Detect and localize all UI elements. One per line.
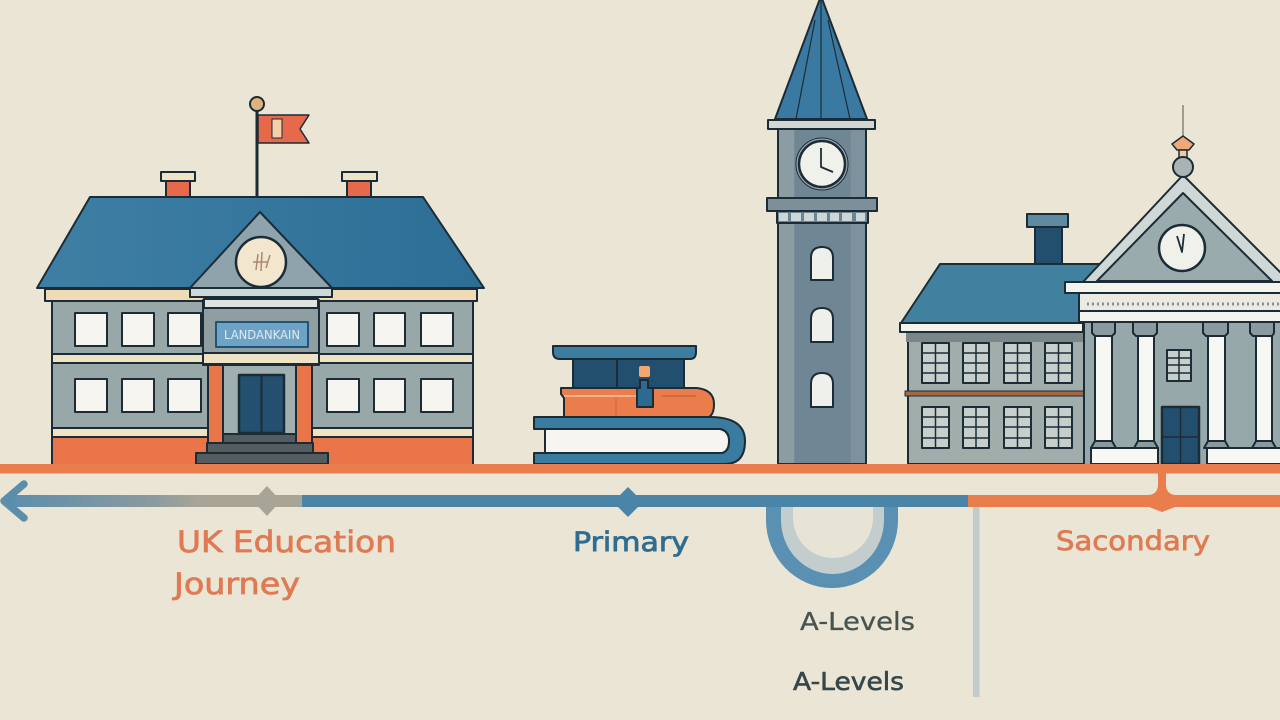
lower wing windows xyxy=(922,407,1072,448)
illustration: secondary school building xyxy=(900,105,1280,465)
label: A-Levels lower: A-Levels xyxy=(793,667,904,696)
gable xyxy=(190,212,332,297)
steps xyxy=(196,434,328,464)
timeline orange segment xyxy=(968,495,1280,507)
label: Secondary: Sacondary xyxy=(1056,526,1210,557)
orange base wall xyxy=(52,437,473,465)
tower clock xyxy=(796,138,848,190)
timeline xyxy=(4,473,1280,697)
secondary connector xyxy=(1149,473,1175,512)
portico wall xyxy=(1084,322,1280,465)
title: UK Education Journey: UK Education xyxy=(177,525,396,559)
pediment clock xyxy=(1159,225,1205,271)
icon: left chimney xyxy=(161,172,195,198)
illustration: clock tower xyxy=(767,0,877,464)
milestone: gray diamond xyxy=(253,486,281,516)
lower windows xyxy=(75,379,453,412)
entrance band xyxy=(203,353,319,364)
vertical divider xyxy=(973,507,980,697)
blue book xyxy=(534,417,745,464)
wing roof xyxy=(901,264,1100,323)
building walls xyxy=(52,300,473,465)
portico window xyxy=(1167,350,1191,381)
orange book xyxy=(561,388,714,417)
entrance recess xyxy=(223,365,296,435)
upper wing windows xyxy=(922,343,1072,383)
upper windows xyxy=(75,313,453,346)
entablature xyxy=(1065,282,1280,293)
spire ledge xyxy=(768,120,875,129)
ground line xyxy=(0,464,1280,474)
clock ledge xyxy=(767,198,877,211)
tower body xyxy=(778,129,866,464)
wing wall xyxy=(908,340,1084,464)
school sign: LANDANKAIN xyxy=(224,328,300,342)
icon: right chimney xyxy=(342,172,377,198)
timeline left segment xyxy=(6,495,302,507)
upper floor band xyxy=(52,354,473,363)
timeline blue segment xyxy=(302,495,969,507)
pediment xyxy=(1083,175,1280,282)
lower floor band xyxy=(52,428,473,437)
illustration: stack of books with graduation cap xyxy=(534,346,745,464)
cap base xyxy=(573,359,684,389)
cornice xyxy=(45,289,477,301)
frieze xyxy=(1079,293,1280,311)
wing cornice xyxy=(900,323,1083,332)
main roof xyxy=(37,197,484,288)
spire xyxy=(775,0,867,119)
dentils xyxy=(777,211,868,223)
arrowhead xyxy=(4,484,24,518)
lower entablature xyxy=(1079,311,1280,322)
wing soffit xyxy=(906,333,1084,342)
title: UK Education Journey xyxy=(172,525,396,601)
milestone: blue diamond xyxy=(613,487,643,517)
icon: flag and pole xyxy=(250,97,309,198)
cap board xyxy=(553,346,696,359)
columns xyxy=(208,365,312,443)
tower windows xyxy=(811,247,833,407)
entrance lintel xyxy=(204,299,318,308)
portico columns xyxy=(1091,322,1276,448)
wing belt course xyxy=(905,391,1089,396)
gable trim xyxy=(190,288,332,297)
label: A-Levels upper: A-Levels xyxy=(800,607,915,636)
title: UK Education Journey: Journey xyxy=(172,567,300,601)
illustration: primary school building xyxy=(37,97,484,465)
finial xyxy=(1172,105,1194,177)
gable clock xyxy=(236,237,286,287)
u-shaped branch xyxy=(766,505,898,588)
tassel xyxy=(637,366,653,407)
central entrance block xyxy=(203,300,319,365)
school sign xyxy=(216,322,308,347)
portico door xyxy=(1162,407,1199,464)
chimney xyxy=(1027,214,1068,265)
column plinths xyxy=(1091,448,1280,464)
door xyxy=(239,375,284,433)
label: Primary: Primary xyxy=(573,527,689,558)
